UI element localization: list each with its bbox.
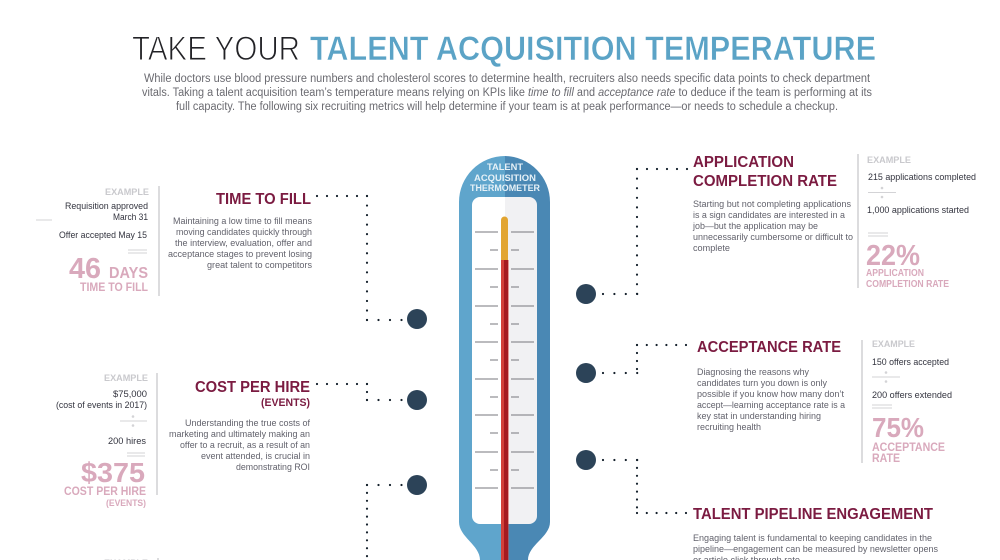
- heading: (EVENTS): [261, 397, 310, 409]
- example: 200 hires: [108, 436, 146, 446]
- panel: application completion rate: [576, 154, 976, 304]
- heading: TIME TO FILL: [216, 191, 311, 208]
- intro text: full capacity. The following six recruiting metrics will help determine if your team is at peak performance—or needs to schedule a checkup.: [176, 101, 838, 113]
- connector: [576, 169, 688, 304]
- example: Offer accepted May 15: [59, 230, 147, 240]
- description: marketing and ultimately making an: [169, 429, 310, 440]
- description: offer to a recruit, as a result of an: [180, 440, 310, 451]
- example: EXAMPLE: [867, 155, 911, 165]
- description: Maintaining a low time to fill means: [173, 216, 312, 227]
- description: is a sign candidates are interested in a: [693, 210, 846, 221]
- description: event attended, is crucial in: [201, 451, 310, 462]
- connector: [317, 384, 427, 410]
- description: Understanding the true costs of: [185, 418, 310, 429]
- thermometer scale ticks: [475, 232, 534, 488]
- example: [36, 187, 149, 294]
- example: 46: [69, 253, 101, 285]
- example: ACCEPTANCE: [872, 440, 945, 454]
- connector: [367, 475, 427, 560]
- intro text: vitals. Taking a talent acquisition team’s temperature means relying on KPIs like time to fill and acceptance rate to deduce if the team is performing at its: [142, 87, 872, 99]
- example: EXAMPLE: [872, 339, 915, 349]
- example: Requisition approved: [65, 201, 148, 211]
- description: key stat in understanding hiring: [697, 411, 821, 422]
- example: EXAMPLE: [105, 187, 149, 197]
- title: TAKE YOUR: [132, 30, 300, 68]
- panel: third left metric (cut off): [104, 475, 427, 560]
- panel: time to fill: [36, 186, 427, 329]
- description: recruiting health: [697, 422, 761, 433]
- description: acceptance stages to prevent losing: [168, 249, 312, 260]
- panel: talent pipeline engagement: [576, 450, 938, 560]
- description: [692, 199, 853, 254]
- heading: [693, 154, 837, 190]
- description: candidates turn you down is only: [697, 378, 827, 389]
- example: (EVENTS): [106, 498, 146, 509]
- example: 75%: [872, 412, 924, 443]
- connector: [576, 345, 688, 383]
- heading: APPLICATION: [693, 154, 794, 171]
- thermometer label: THERMOMETER: [470, 183, 540, 193]
- example: [866, 155, 976, 290]
- example: 200 offers extended: [872, 390, 952, 400]
- description: [693, 533, 938, 560]
- example: [56, 373, 148, 509]
- title: TALENT ACQUISITION TEMPERATURE: [310, 30, 876, 68]
- heading: COST PER HIRE: [195, 379, 310, 396]
- example: 150 offers accepted: [872, 357, 949, 367]
- example: APPLICATION: [866, 268, 924, 279]
- example: TIME TO FILL: [80, 280, 148, 294]
- description: [697, 367, 846, 433]
- example: $75,000: [113, 389, 147, 399]
- description: the interview, evaluation, offer and: [175, 238, 312, 249]
- description: [169, 418, 310, 473]
- mercury column: [501, 217, 508, 560]
- panel: cost per hire: [56, 373, 427, 509]
- example: 22%: [866, 240, 920, 272]
- connector: [576, 450, 688, 514]
- example: DAYS: [109, 265, 148, 282]
- example: [872, 339, 952, 465]
- intro text: While doctors use blood pressure numbers and cholesterol scores to determine health, recruiters also needs specific data points to check department: [144, 73, 871, 85]
- description: possible if you know how many don’t: [697, 389, 844, 400]
- example: 215 applications completed: [868, 172, 976, 182]
- example: $375: [81, 457, 145, 488]
- description: job—but the application may be: [692, 221, 818, 232]
- example: COMPLETION RATE: [866, 279, 949, 290]
- description: [168, 216, 312, 271]
- description: Engaging talent is fundamental to keeping candidates in the: [693, 533, 932, 544]
- example: EXAMPLE: [104, 373, 148, 383]
- example: March 31: [113, 212, 148, 222]
- description: unnecessarily cumbersome or difficult to: [693, 232, 853, 243]
- intro text: [142, 73, 872, 113]
- description: complete: [693, 243, 730, 254]
- heading: [195, 379, 310, 409]
- example: RATE: [872, 451, 900, 465]
- thermometer body: [459, 156, 550, 560]
- heading: TALENT PIPELINE ENGAGEMENT: [693, 506, 933, 523]
- description: Diagnosing the reasons why: [697, 367, 809, 378]
- example: 1,000 applications started: [867, 205, 969, 215]
- example: (cost of events in 2017): [56, 400, 147, 410]
- thermometer label: [470, 162, 540, 193]
- thermometer label: ACQUISITION: [474, 173, 536, 183]
- thermometer: [459, 156, 550, 560]
- description: moving candidates quickly through: [176, 227, 312, 238]
- heading: COMPLETION RATE: [693, 173, 837, 190]
- description: demonstrating ROI: [236, 462, 310, 473]
- connector: [317, 196, 427, 329]
- description: great talent to competitors: [207, 260, 312, 271]
- thermometer label: TALENT: [487, 162, 524, 172]
- panel: acceptance rate: [576, 339, 952, 465]
- example: COST PER HIRE: [64, 484, 146, 498]
- description: Starting but not completing applications: [693, 199, 851, 210]
- description: accept—learning acceptance rate is a: [697, 400, 846, 411]
- description: pipeline—engagement can be measured by newsletter opens: [693, 544, 938, 555]
- heading: ACCEPTANCE RATE: [697, 339, 841, 356]
